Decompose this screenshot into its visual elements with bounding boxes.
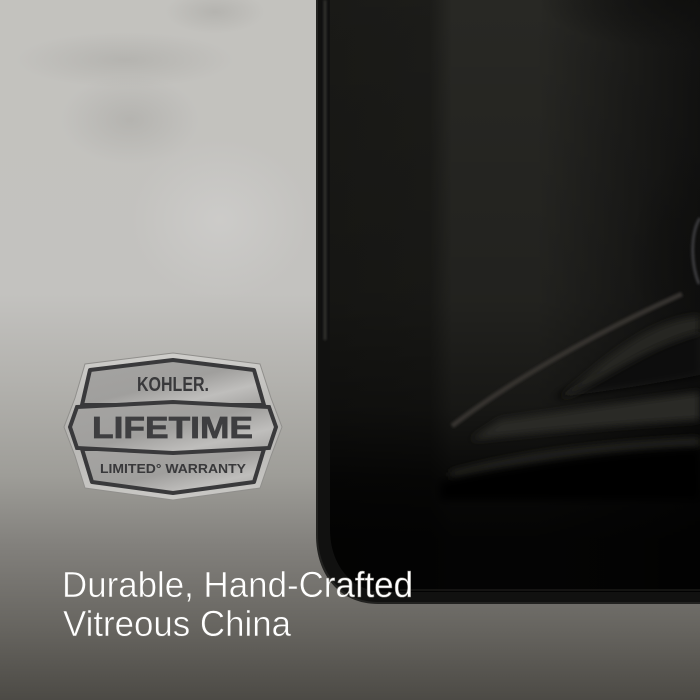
sink drain edge xyxy=(693,218,700,284)
badge bottom panel xyxy=(82,449,264,493)
badge top panel xyxy=(82,360,264,405)
rim streak xyxy=(324,0,326,340)
badge subtitle: LIMITED° WARRANTY xyxy=(100,461,246,476)
sink reflections xyxy=(400,294,700,590)
badge outer plate xyxy=(64,353,282,500)
caption line 1: Durable, Hand-Crafted xyxy=(62,564,413,605)
caption xyxy=(62,564,413,644)
brand name: KOHLER. xyxy=(137,374,209,396)
black vitreous china sink xyxy=(316,0,700,604)
dark corners xyxy=(540,0,700,50)
warranty badge xyxy=(64,353,282,500)
badge center band xyxy=(70,402,276,453)
badge main word: LIFETIME xyxy=(92,410,253,445)
caption line 2: Vitreous China xyxy=(63,603,292,644)
